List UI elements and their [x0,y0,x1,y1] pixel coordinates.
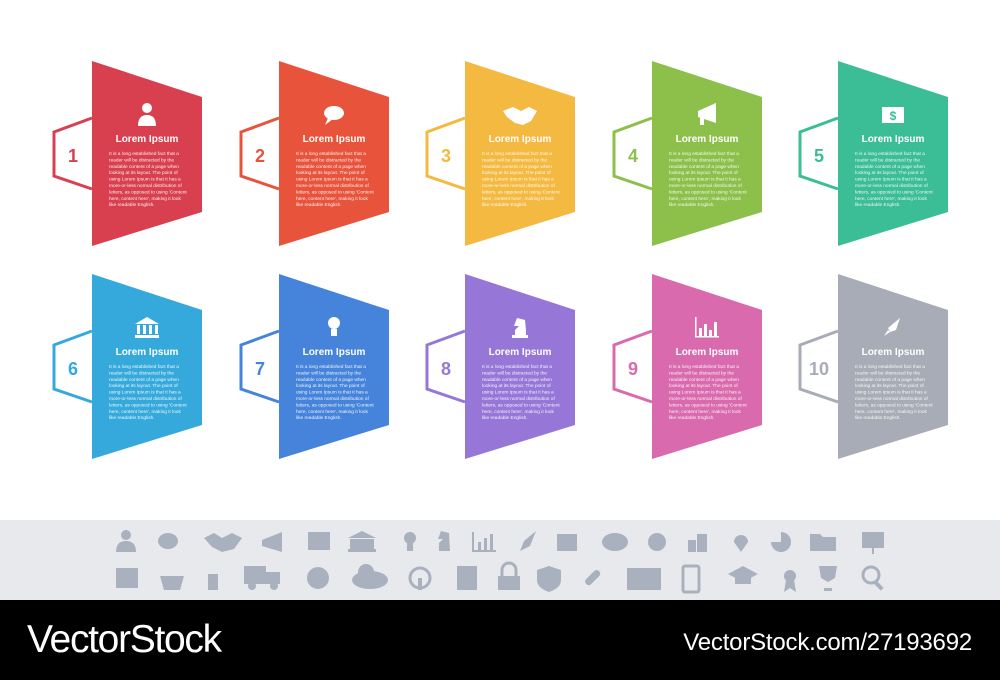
card 5: Lorem Ipsum [862,134,924,145]
card 1 [54,61,202,246]
icon: person [138,103,156,126]
card 2: Lorem Ipsum [303,134,365,145]
card 7: 7 [255,359,265,379]
card 4: Lorem Ipsum [676,134,738,145]
card 5 [800,61,948,246]
card 8: Lorem Ipsum [489,347,551,358]
card 6: 6 [68,359,78,379]
icon: speech bubble [324,106,344,125]
card 10: 10 [809,359,829,379]
card 3: Lorem Ipsum [489,134,551,145]
card 5: 5 [814,146,824,166]
card 7 [241,274,389,459]
card 1: 1 [68,146,78,166]
card 9: 9 [628,359,638,379]
icon: money: $ [890,109,897,123]
card 8 [427,274,575,459]
footer: VectorStock [27,618,223,661]
icon: bank [135,317,159,338]
card 3 [427,61,575,246]
icon: rocket [884,318,900,336]
card 10: Lorem Ipsum [862,347,924,358]
card 2 [241,61,389,246]
card 8: 8 [441,359,451,379]
card 9 [614,274,762,459]
card 10 [800,274,948,459]
card 3: 3 [441,146,451,166]
card 6: Lorem Ipsum [116,347,178,358]
icon: chess knight [512,318,528,338]
card 1: Lorem Ipsum [116,134,178,145]
card 7: Lorem Ipsum [303,347,365,358]
row 1 icons [116,530,884,554]
footer [0,600,1000,680]
icon: bar chart [695,317,719,338]
icon strip [0,520,1000,600]
footer: VectorStock.com/27193692 [683,629,972,656]
card 6 [54,274,202,459]
icon: money [882,107,904,123]
icon: bulb [328,317,340,336]
card 9: Lorem Ipsum [676,347,738,358]
card 4 [614,61,762,246]
icon: megaphone [698,103,716,125]
card 4: 4 [628,146,638,166]
card 2: 2 [255,146,265,166]
icon: handshake [503,107,537,125]
row 2 icons [116,563,884,592]
